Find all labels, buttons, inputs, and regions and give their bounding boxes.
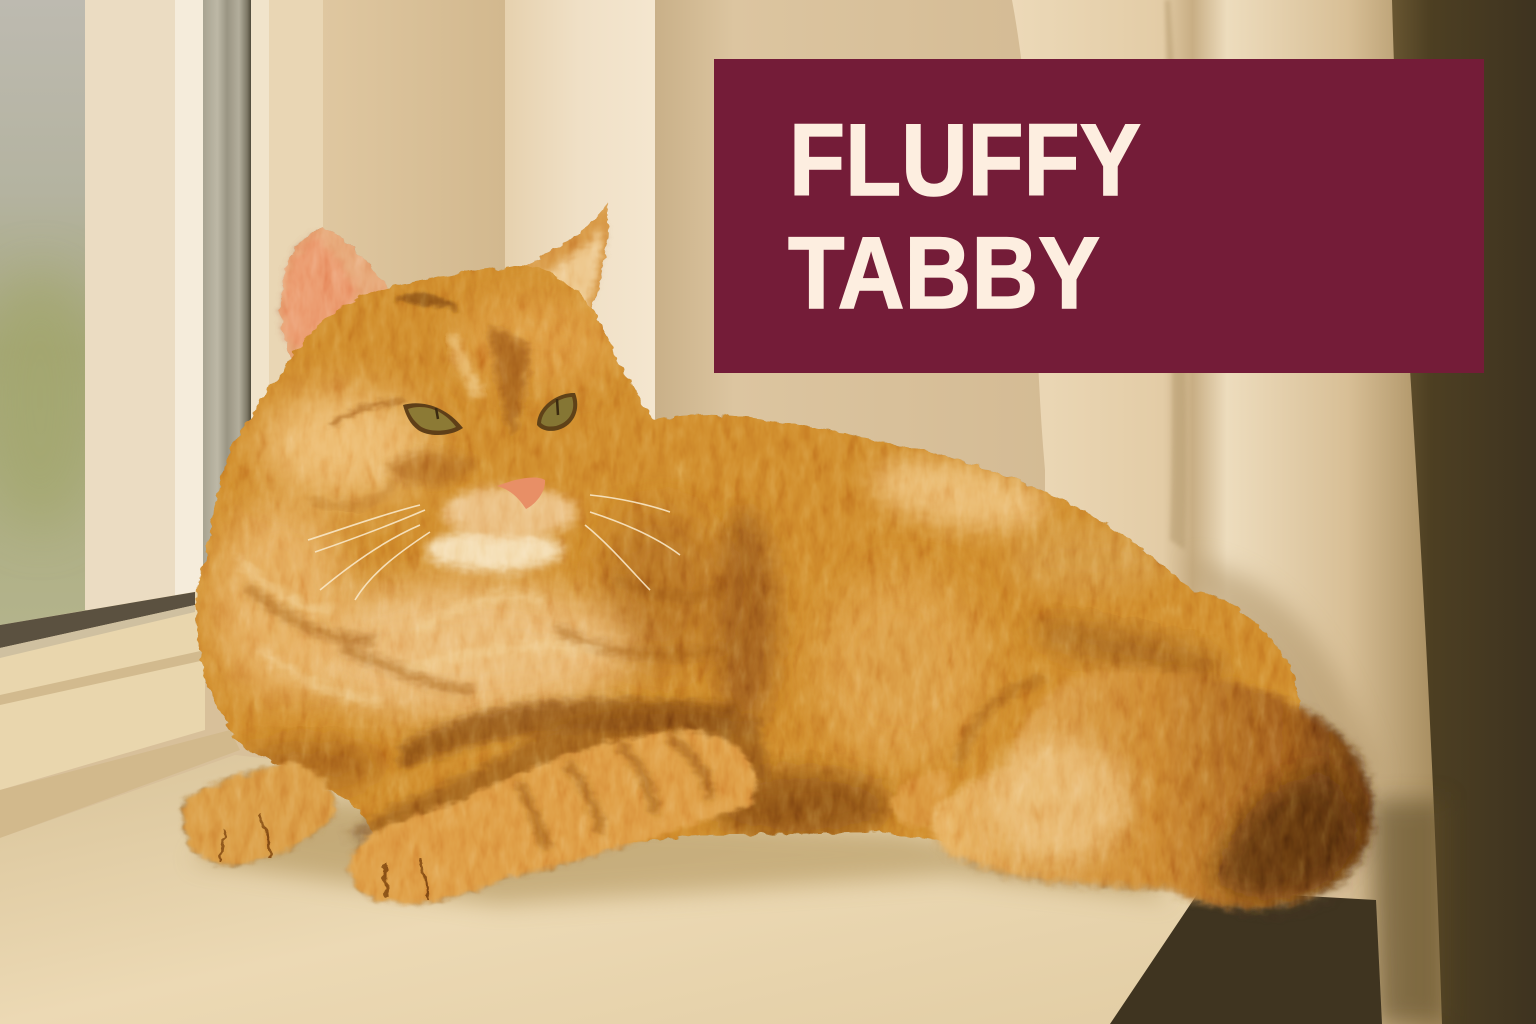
ear right [520,204,608,320]
window sill [0,755,1200,1024]
title text: FLUFFY [789,103,1141,217]
window frame bottom [0,590,240,838]
curtain [1012,0,1445,1024]
shadow under cat [190,800,1170,905]
window reveal [85,0,205,610]
tail [932,668,1373,908]
cat [182,204,1373,908]
hind paw [890,772,950,826]
front leg and paw right [349,730,756,903]
window frame metal [203,0,251,600]
cat silhouette and fur shading [196,265,1300,870]
window view outside [0,0,100,640]
title panel [714,59,1484,373]
whiskers [308,495,680,600]
back ear left [280,226,392,375]
shadow above right leg [345,710,770,850]
nose [497,478,545,509]
face markings [310,294,578,572]
title text [788,103,1141,330]
wall panels [323,0,1050,520]
eye right [537,393,577,431]
title text: TABBY [788,216,1100,330]
window inner frame [251,0,325,500]
dark corner right [1385,0,1536,1024]
sill front edge [1110,890,1382,1024]
front paw left [182,760,336,865]
eye left [403,403,463,435]
